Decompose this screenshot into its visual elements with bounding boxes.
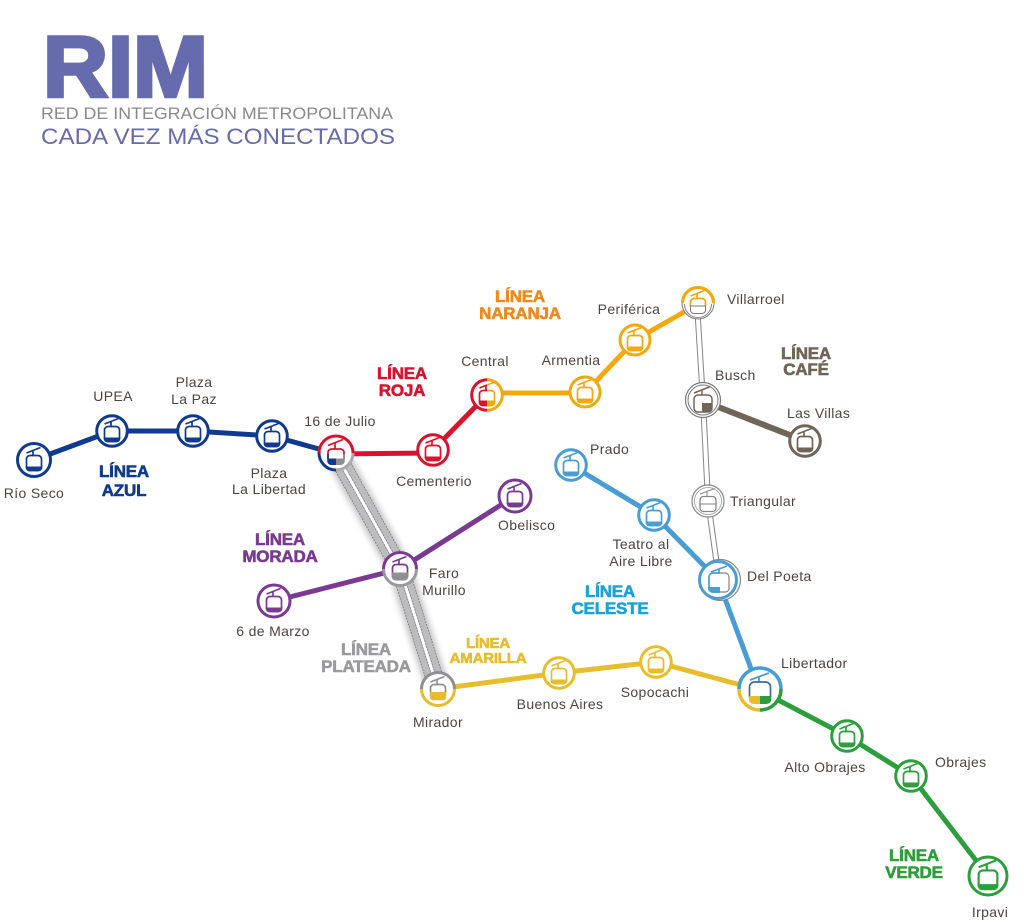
label: Obrajes: Obrajes — [935, 754, 986, 770]
station: Prado — [556, 450, 586, 480]
title: Línea Azul: AZUL — [102, 481, 146, 500]
label: UPEA: UPEA — [93, 388, 133, 404]
station: Mirador — [422, 672, 454, 706]
line: cafe — [703, 401, 805, 441]
line: amarilla — [438, 662, 759, 690]
station: Cementerio — [418, 435, 448, 465]
station: 6 de Marzo — [258, 585, 290, 617]
station: Alto Obrajes — [832, 721, 862, 751]
label: Teatro al Aire Libre: Aire Libre — [609, 553, 673, 569]
station: UPEA — [97, 416, 127, 446]
label: Teatro al Aire Libre: Teatro al — [613, 536, 669, 552]
label: Prado: Prado — [590, 441, 629, 457]
station: Obelisco — [499, 480, 531, 512]
label: Villarroel: Villarroel — [727, 291, 785, 307]
logo tagline: CADA VEZ MÁS CONECTADOS — [41, 124, 395, 149]
line: plateada cable — [336, 454, 438, 689]
label: 16 de Julio: 16 de Julio — [304, 413, 376, 429]
label: Triangular: Triangular — [730, 493, 796, 509]
title: Línea Azul: LÍNEA — [99, 462, 149, 481]
label: Periférica: Periférica — [598, 301, 660, 317]
label: Busch: Busch — [715, 367, 756, 383]
title: Línea Café: LÍNEA — [781, 344, 831, 363]
label: Mirador: Mirador — [413, 714, 463, 730]
title: Línea Café: CAFÉ — [783, 360, 829, 379]
station: Periférica — [620, 325, 650, 355]
label: Río Seco: Río Seco — [4, 485, 64, 501]
station: Sopocachi — [641, 647, 671, 677]
logo wordmark: RIM — [43, 20, 208, 116]
label: Buenos Aires: Buenos Aires — [517, 696, 603, 712]
logo: RIM — [41, 20, 395, 149]
label: Alto Obrajes: Alto Obrajes — [784, 759, 866, 775]
station: Armentia — [570, 377, 600, 407]
label: Armentia: Armentia — [542, 352, 600, 368]
title: Línea Celeste: LÍNEA — [585, 582, 635, 601]
title: Línea Verde: LÍNEA — [889, 846, 939, 865]
label: Plaza La Libertad: Plaza — [251, 465, 287, 481]
station: Río Seco — [18, 444, 50, 476]
title: Línea Naranja: NARANJA — [479, 304, 561, 323]
station: Irpavi — [969, 857, 1007, 895]
line: naranja — [487, 304, 698, 393]
title: Línea Naranja: LÍNEA — [495, 287, 545, 306]
station: Las Villas — [790, 426, 820, 456]
line: azul — [34, 431, 337, 460]
label: 6 de Marzo: 6 de Marzo — [236, 623, 310, 639]
title: Línea Celeste: CELESTE — [571, 599, 649, 618]
label: Irpavi: Irpavi — [972, 904, 1008, 920]
station: Faro Murillo — [384, 552, 416, 586]
title: Línea Amarilla: LÍNEA — [466, 635, 510, 652]
title: Línea Plateada: PLATEADA — [321, 657, 411, 676]
station: Del Poeta — [700, 560, 740, 600]
label: Del Poeta: Del Poeta — [747, 568, 812, 584]
logo subtitle: RED DE INTEGRACIÓN METROPOLITANA — [41, 104, 393, 123]
station: Teatro al Aire Libre — [639, 500, 669, 530]
station: Triangular — [692, 485, 724, 517]
line: blanca cable — [697, 304, 719, 580]
line titles — [99, 287, 943, 882]
label: Obelisco: Obelisco — [498, 517, 555, 533]
station: Buenos Aires — [544, 658, 574, 688]
label: Las Villas: Las Villas — [787, 405, 850, 421]
line: verde — [759, 690, 988, 876]
title: Línea Roja: LÍNEA — [377, 364, 427, 383]
station: Busch — [686, 382, 720, 418]
label: Cementerio: Cementerio — [396, 473, 472, 489]
title: Línea Verde: VERDE — [885, 863, 943, 882]
label: Sopocachi: Sopocachi — [621, 684, 689, 700]
station: Central — [472, 380, 502, 410]
station: Obrajes — [896, 761, 926, 791]
station: Plaza La Libertad — [257, 421, 287, 451]
label: Libertador: Libertador — [781, 655, 848, 671]
label: Faro Murillo: Faro — [429, 565, 459, 581]
station: 16 de Julio — [319, 436, 353, 470]
station: Plaza La Paz — [178, 416, 208, 446]
label: Plaza La Paz: Plaza — [176, 374, 212, 390]
label: Plaza La Paz: La Paz — [171, 391, 217, 407]
station labels — [4, 291, 1008, 920]
line: morada — [274, 496, 515, 601]
label: Faro Murillo: Murillo — [422, 582, 466, 598]
title: Línea Roja: ROJA — [379, 381, 425, 400]
title: Línea Amarilla: AMARILLA — [450, 650, 527, 667]
label: Plaza La Libertad: La Libertad — [232, 481, 306, 497]
line: celeste — [571, 465, 759, 690]
label: Central: Central — [461, 353, 509, 369]
station: Libertador — [739, 668, 781, 710]
station: Villarroel — [682, 287, 714, 319]
title: Línea Morada: LÍNEA — [255, 530, 305, 549]
title: Línea Morada: MORADA — [242, 547, 318, 566]
title: Línea Plateada: LÍNEA — [341, 640, 391, 659]
line: roja — [337, 395, 487, 454]
